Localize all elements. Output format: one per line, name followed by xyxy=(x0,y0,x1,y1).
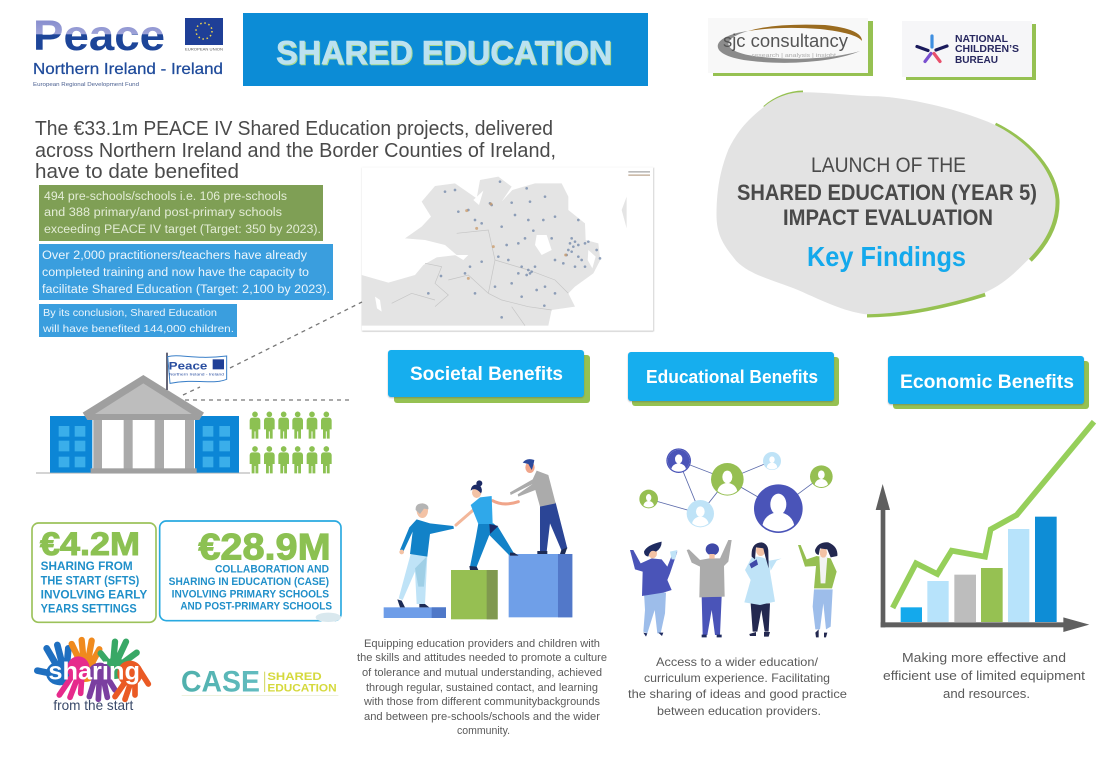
icon: EU flag: EUROPEAN UNION xyxy=(185,46,223,52)
icon: star xyxy=(917,36,947,62)
fund name: European Regional Development Fund xyxy=(33,82,139,88)
logo: National Children's Bureau: CHILDREN’S xyxy=(955,44,1019,55)
panel: CASE funding: SHARING IN EDUCATION (CASE) xyxy=(169,576,329,588)
title banner: SHARED EDUCATION xyxy=(276,34,612,71)
panel: SFTS funding xyxy=(32,523,156,622)
chart: growth bars and trend line xyxy=(876,422,1094,632)
logo: CASE shared education: SHARED xyxy=(267,671,322,683)
illustration: school building with flag xyxy=(36,353,250,473)
logo: sharing from the start: sharing xyxy=(48,658,140,685)
callout: teachers trained xyxy=(39,244,333,300)
heading: shared education year 5: SHARED EDUCATION (YEAR 5) xyxy=(737,180,1037,205)
callout: teachers trained: Over 2,000 practitioners/teachers have already xyxy=(42,250,307,262)
person: woman in light dress xyxy=(744,542,782,637)
panel: SFTS funding: THE START (SFTS) xyxy=(41,573,139,587)
logo: CASE shared education: EDUCATION xyxy=(267,683,337,695)
text: educational benefits: Access to a wider education/ xyxy=(656,655,819,669)
connector lines from flag to map xyxy=(183,302,362,400)
text: societal benefits: the skills and attitudes needed to promote a culture xyxy=(357,652,607,664)
title banner xyxy=(243,13,648,86)
callout: children benefited: By its conclusion, Shared Education xyxy=(43,307,217,319)
text: educational benefits xyxy=(628,655,847,718)
text: societal benefits: of tolerance and mutual understanding, achieved xyxy=(362,667,602,679)
icon: EU flag xyxy=(185,18,223,52)
text: societal benefits: through regular, sustained contact, and learning xyxy=(366,682,598,694)
callout: schools benefited: 494 pre-schools/schools i.e. 106 pre-schools xyxy=(44,191,287,203)
panel: CASE funding xyxy=(160,521,341,622)
intro text: The €33.1m PEACE IV Shared Education projects, delivered xyxy=(35,118,553,140)
logo: sharing from the start: from the start xyxy=(53,697,133,713)
title banner: SHARED EDUCATION xyxy=(277,35,613,72)
text: societal benefits: and between pre-schools/schools and the wider xyxy=(364,711,600,723)
text: educational benefits: between education providers. xyxy=(657,704,821,718)
intro text: have to date benefited xyxy=(35,161,239,183)
icon: flag xyxy=(167,353,227,390)
logo: PEACE Northern Ireland - Ireland xyxy=(33,12,223,88)
intro text xyxy=(35,118,556,183)
person: woman in the middle xyxy=(456,480,519,570)
logo: sjc consultancy: research | analysis | insight xyxy=(752,53,837,59)
logo: National Children's Bureau xyxy=(902,21,1036,80)
logo: sjc consultancy xyxy=(708,18,873,76)
icon: flag: Northern Ireland - Ireland xyxy=(169,372,224,376)
text: economic benefits: efficient use of limited equipment xyxy=(883,668,1085,683)
person: woman in green jacket xyxy=(798,542,837,637)
programme name: Northern Ireland - Ireland xyxy=(33,61,223,78)
heading: societal benefits xyxy=(388,350,590,403)
text: educational benefits: curriculum experience. Facilitating xyxy=(644,671,830,685)
icon: flag: Peace xyxy=(169,360,207,372)
steps xyxy=(384,554,572,619)
text: economic benefits: Making more effective and xyxy=(902,650,1066,665)
heading: economic benefits: Economic Benefits xyxy=(900,372,1074,393)
illustration: people helping each other up steps xyxy=(384,459,572,619)
text: societal benefits: with those from different communitybackgrounds xyxy=(363,696,600,708)
trend line xyxy=(893,422,1094,608)
person: blue jacket xyxy=(630,542,677,637)
heading: educational benefits: Educational Benefits xyxy=(646,367,818,387)
callout: schools benefited xyxy=(39,185,323,241)
callout: children benefited: will have benefited 144,000 children. xyxy=(42,323,234,335)
panel: CASE funding: €28.9M xyxy=(198,526,331,567)
wordmark: Peace: Peace xyxy=(33,12,165,60)
text: economic benefits: and resources. xyxy=(943,686,1030,701)
heading: economic benefits xyxy=(888,356,1089,409)
callout: schools benefited: exceeding PEACE IV target (Target: 350 by 2023). xyxy=(44,224,321,236)
person: man on top step xyxy=(510,459,567,554)
callout: teachers trained: facilitate Shared Education (Target: 2,100 by 2023). xyxy=(42,284,330,296)
panel: key findings blob xyxy=(716,92,1057,315)
logo: CASE shared education xyxy=(181,666,338,699)
panel: SFTS funding: SHARING FROM xyxy=(41,559,133,573)
text: educational benefits: the sharing of ideas and good practice xyxy=(628,687,847,701)
callout: teachers trained: completed training and now have the capacity to xyxy=(42,267,309,279)
text: societal benefits xyxy=(357,638,607,737)
callout: children benefited xyxy=(39,304,237,337)
logo: National Children's Bureau: BUREAU xyxy=(955,55,998,66)
panel: SFTS funding: YEARS SETTINGS xyxy=(41,602,137,616)
person: grey jacket xyxy=(687,540,732,637)
heading: launch: LAUNCH OF THE xyxy=(811,154,966,177)
text: societal benefits: community. xyxy=(457,725,510,737)
heading: key findings: Key Findings xyxy=(807,241,966,272)
map of project locations xyxy=(362,167,653,331)
icon: rows of children xyxy=(250,411,332,473)
illustration: network of people xyxy=(630,448,837,637)
callout: schools benefited: and 388 primary/and post-primary schools xyxy=(44,207,282,219)
heading: societal benefits: Societal Benefits xyxy=(410,364,563,385)
logo: sharing from the start xyxy=(37,640,148,713)
logo: sjc consultancy: sjc consultancy xyxy=(723,31,848,51)
network xyxy=(639,448,833,542)
logo: CASE shared education: CASE xyxy=(181,666,260,699)
heading: educational benefits xyxy=(628,352,839,406)
panel: SFTS funding: €4.2M xyxy=(40,526,140,562)
intro text: across Northern Ireland and the Border Counties of Ireland, xyxy=(35,140,556,162)
panel: CASE funding: AND POST-PRIMARY SCHOOLS xyxy=(180,601,332,613)
bars xyxy=(901,517,1057,622)
panel: CASE funding: INVOLVING PRIMARY SCHOOLS xyxy=(172,588,329,600)
heading: impact evaluation: IMPACT EVALUATION xyxy=(783,205,993,230)
panel: SFTS funding: INVOLVING EARLY xyxy=(41,587,148,601)
panel: CASE funding: COLLABORATION AND xyxy=(215,563,329,575)
text: societal benefits: Equipping education providers and children with xyxy=(364,638,600,650)
text: economic benefits xyxy=(883,650,1085,701)
axes xyxy=(876,484,1089,632)
person: older man xyxy=(397,503,454,607)
logo: National Children's Bureau: NATIONAL xyxy=(955,34,1008,45)
